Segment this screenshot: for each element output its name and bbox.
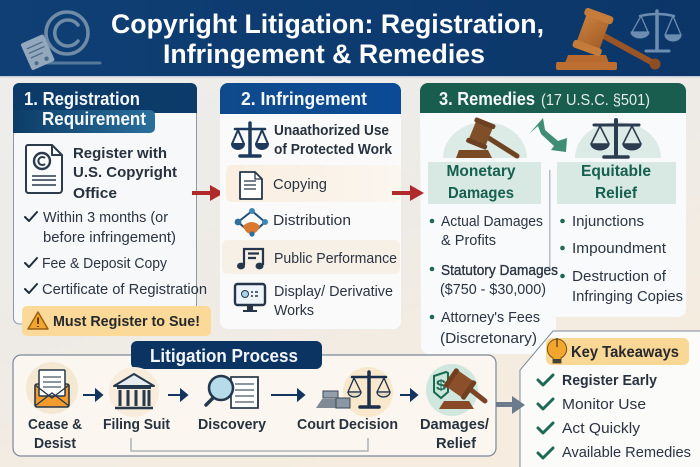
panel: key takeaways [520,331,700,467]
row: display and derivative works: Display/ Derivative [274,283,393,300]
step: discovery: Discovery [198,416,267,433]
callout: must register to sue: Must Register to Sue! [53,313,200,330]
list: takeaways: Monitor Use [562,396,646,413]
list: equitable relief: Infringing Copies [572,288,683,305]
heading: equitable relief [557,162,676,204]
icon: registration document [26,145,62,193]
icon: copyright symbol and certificate [20,12,100,71]
list: equitable relief: Destruction of [572,268,667,285]
list: monetary damages: Actual Damages [441,213,543,230]
icon: scales [232,123,268,156]
icon: header gavel [556,7,660,70]
heading: registration [13,83,197,133]
list: equitable relief: Injunctions [572,213,644,230]
step: damages and relief: Relief [436,435,477,452]
list: equitable relief: Impoundment [572,240,667,257]
step: filing suit [103,367,170,433]
arrow: step 3 to 4 [271,390,304,400]
icon: light bulb [547,338,567,363]
row: distribution [235,208,351,237]
step: cease and desist: Cease & [28,416,82,433]
step: court decision: Court Decision [297,416,398,433]
arrow: step 4 to 5 [400,390,417,400]
row: display and derivative works [235,283,393,319]
arrow: step 1 to 2 [83,390,102,400]
text: unauthorized use: of Protected Work [274,141,393,158]
title: Infringement & Remedies [163,39,485,69]
text: unauthorized use [274,122,393,158]
heading: infringement: 2. Infringement [241,89,367,109]
heading: remedies [420,83,686,113]
row: copying: Copying [273,176,327,193]
list: monetary damages: ($750 - $30,000) [440,281,546,298]
step: court decision [297,367,398,433]
heading: key takeaways: Key Takeaways [571,344,679,361]
heading: litigation process: Litigation Process [150,346,298,366]
row: public performance [222,240,400,274]
arrow: infringement to remedies [392,185,424,201]
list: equitable relief [560,213,683,305]
heading: remedies: (17 U.S.C. §501) [541,92,650,109]
checklist: before infringement) [43,229,176,246]
heading: registration: Requirement [42,109,146,129]
icon: gavel on green dome [443,117,527,158]
icon: scales on green dome [575,120,661,158]
text: register with office: Office [73,185,117,202]
step: damages and relief: $ [436,377,447,394]
list: takeaways: Act Quickly [562,420,641,437]
panel: remedies [420,83,686,354]
connector bracket [131,438,368,451]
text: unauthorized use: Unaathorized Use [274,122,389,139]
title [111,9,544,69]
row: distribution: Distribution [273,212,351,229]
checklist [25,209,207,298]
checklist: Certificate of Registration [42,281,207,298]
heading: litigation process [131,341,322,369]
heading: equitable relief: Relief [595,185,638,202]
arrow: process to takeaways [496,396,525,414]
heading: registration: 1. Registration [24,89,140,109]
text: register with office [73,145,177,202]
heading: equitable relief: Equitable [581,163,651,180]
heading: key takeaways [546,338,689,365]
icon: header scales [631,11,681,51]
list: takeaways: Available Remedies [562,444,691,461]
step: discovery [198,376,267,433]
row: display and derivative works: Works [274,302,314,319]
divider: remedy columns [549,170,550,270]
step: cease and desist: Desist [34,435,76,452]
checklist: Within 3 months (or [43,209,168,226]
step: filing suit: Filing Suit [103,416,170,433]
callout: must register to sue [22,306,211,336]
heading: monetary damages: Monetary [446,163,516,180]
checklist: Fee & Deposit Copy [42,255,167,272]
text: register with office: Register with [73,145,167,162]
heading: monetary damages: Damages [448,185,514,202]
arrow: remedies branch [529,118,567,152]
list: monetary damages [430,213,558,347]
list: monetary damages: Statutory Damages [441,262,558,279]
step: damages and relief [420,364,490,452]
list: monetary damages: (Discretonary) [440,330,537,347]
text: register with office: U.S. Copyright [73,164,177,181]
heading: monetary damages [428,162,541,204]
heading: remedies: 3. Remedies [439,89,535,109]
panel: litigation process [13,341,496,456]
heading: infringement [220,83,401,114]
arrow: registration to infringement [192,185,224,201]
row: public performance: Public Performance [274,250,397,267]
list: takeaways: Register Early [562,372,658,389]
list: monetary damages: & Profits [441,232,496,249]
panel: registration requirement [13,83,211,336]
row: copying [226,165,401,202]
step: damages and relief: Damages/ [420,416,490,433]
arrow: step 2 to 3 [168,390,187,400]
panel: infringement [220,83,401,329]
title: Copyright Litigation: Registration, [111,9,544,39]
list: takeaways [538,372,691,461]
step: cease and desist [26,362,82,452]
header banner [0,0,700,78]
list: monetary damages: Attorney's Fees [441,309,540,326]
